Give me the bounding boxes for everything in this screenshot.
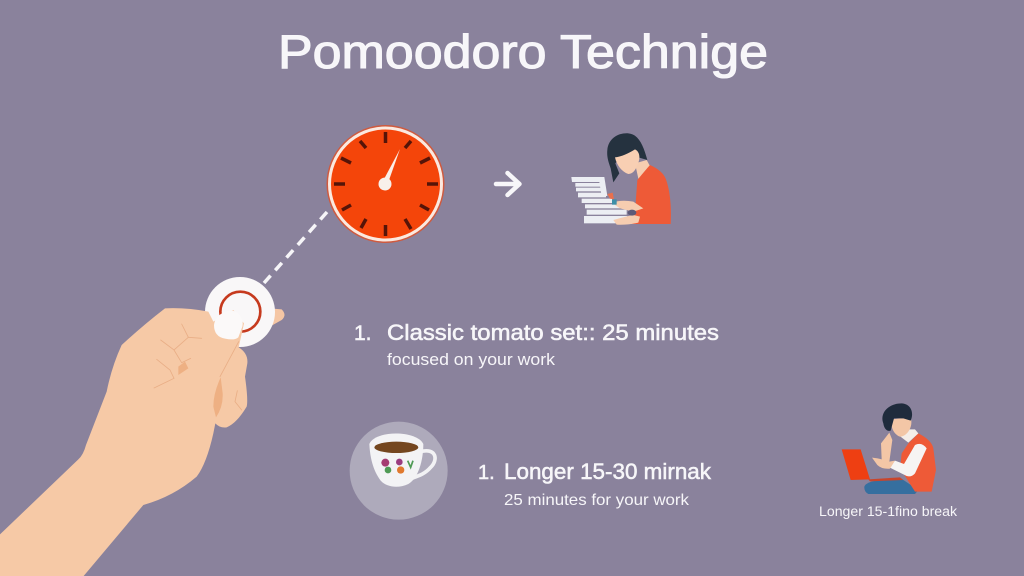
hands (872, 433, 895, 469)
step 1 text: Classic tomato set:: 25 minutes (387, 320, 719, 345)
arrow (496, 173, 520, 195)
icon: hand pressing button (0, 277, 284, 576)
icon: coffee cup (350, 422, 448, 520)
step 1 text (354, 320, 719, 369)
step 1 text: 1. (354, 322, 372, 345)
laptop screen (842, 449, 870, 480)
step 2 text: Longer 15-30 mirnak (504, 459, 712, 484)
face (891, 418, 911, 437)
icon: woman reading papers (571, 133, 671, 225)
white sleeve (889, 444, 927, 476)
hand (0, 308, 247, 576)
icon: man with laptop (842, 403, 936, 494)
fingertip behind button (270, 308, 284, 326)
step 2 text: 1. (478, 462, 495, 484)
thumbnail (214, 311, 243, 339)
face (615, 149, 639, 174)
sweater (628, 165, 671, 224)
neck and collar (898, 429, 918, 443)
finger shading (213, 377, 223, 417)
papers (571, 177, 627, 223)
handle (412, 451, 435, 478)
floral pattern (381, 459, 413, 474)
vest (900, 433, 936, 492)
icon caption: Longer 15-1fino break (819, 504, 957, 519)
dashed connector line (264, 212, 327, 283)
legs (864, 479, 918, 494)
step 2 text (478, 459, 712, 509)
icon: clock timer (326, 125, 444, 243)
title: Pomoodoro Technige (278, 25, 768, 78)
step 2 text: 25 minutes for your work (504, 492, 690, 509)
coffee (374, 442, 418, 453)
step 1 text: focused on your work (387, 350, 556, 369)
arms and hands (612, 201, 643, 212)
hair (607, 133, 647, 182)
knuckle lines (154, 324, 242, 410)
neck (635, 160, 650, 180)
button (205, 277, 275, 347)
cup body (369, 433, 423, 487)
hair (882, 403, 912, 431)
